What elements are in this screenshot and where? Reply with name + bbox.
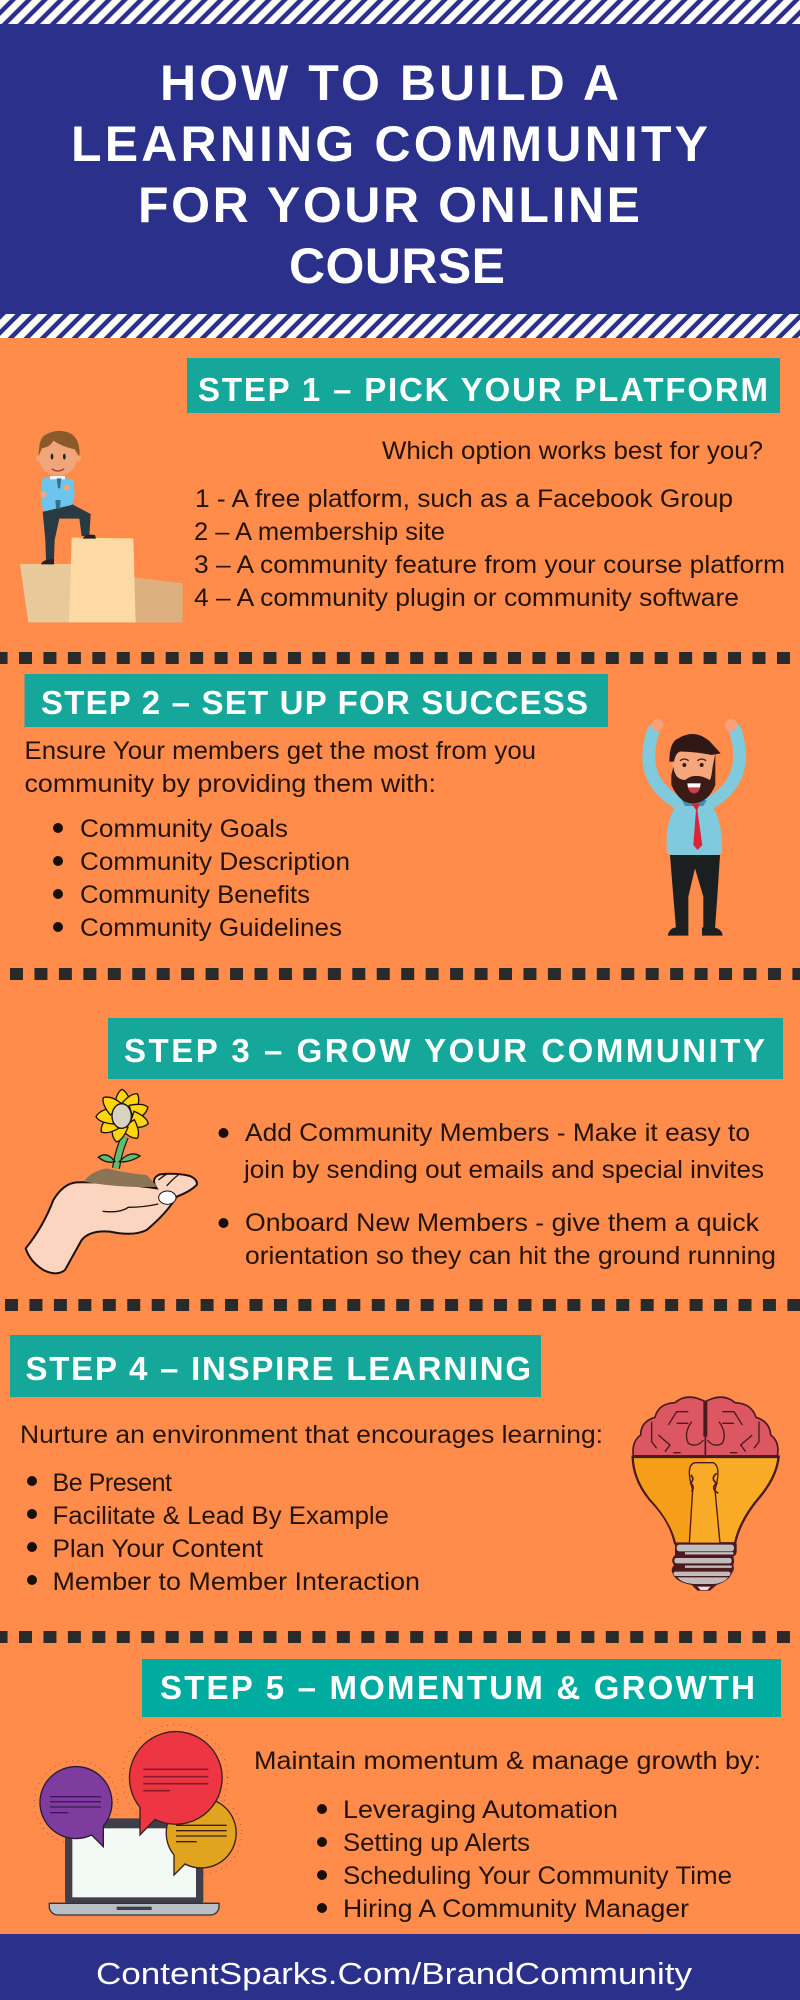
step 4 bullet list: Member to Member Interaction — [52, 1568, 420, 1596]
step 2 heading: STEP 2 – SET UP FOR SUCCESS — [41, 684, 588, 721]
step 1 options list: 2 – A membership site — [194, 518, 445, 546]
step 4 bullet list: Facilitate & Lead By Example — [52, 1502, 389, 1530]
icon: cheering bearded man — [649, 719, 740, 936]
step 4 bullet list — [27, 1469, 420, 1596]
step 2 bullet list: Community Goals — [80, 815, 288, 843]
footer url: ContentSparks.Com/BrandCommunity — [96, 1956, 693, 1991]
step 3 bullet list — [218, 1119, 776, 1270]
step 2 intro text: community by providing them with: — [24, 770, 436, 798]
step 2 bullet list: Community Benefits — [80, 881, 310, 909]
footer banner — [0, 1934, 800, 2000]
step 2 heading — [24, 674, 608, 727]
step 2 intro text — [24, 737, 536, 798]
step 4 heading — [10, 1335, 541, 1397]
step 3 heading: STEP 3 – GROW YOUR COMMUNITY — [124, 1032, 765, 1069]
step 4 heading: STEP 4 – INSPIRE LEARNING — [26, 1350, 531, 1387]
step 1 options list: 4 – A community plugin or community software — [194, 584, 739, 612]
panel: step 5 — [34, 1659, 781, 1923]
panel: step 2 — [24, 674, 740, 942]
title: FOR YOUR ONLINE — [138, 177, 640, 233]
step 5 bullet list: Hiring A Community Manager — [343, 1895, 689, 1923]
title: LEARNING COMMUNITY — [71, 116, 708, 172]
panel: step 1 — [20, 358, 785, 622]
step 5 heading — [142, 1659, 781, 1717]
step 2 bullet list — [53, 815, 350, 942]
panel: step 4 — [10, 1335, 779, 1596]
icon: hand holding sunflower — [26, 1089, 197, 1273]
icon: brain light bulb — [633, 1397, 779, 1591]
step 5 bullet list: Setting up Alerts — [343, 1829, 530, 1857]
step 1 options list: 1 - A free platform, such as a Facebook Group — [195, 485, 733, 513]
icon: laptop with speech bubbles — [34, 1725, 242, 1915]
title — [71, 55, 708, 294]
step 1 intro text: Which option works best for you? — [382, 437, 763, 465]
step 5 bullet list: Scheduling Your Community Time — [343, 1862, 732, 1890]
title: HOW TO BUILD A — [160, 55, 619, 111]
step 5 bullet list — [317, 1796, 732, 1923]
step 4 bullet list: Plan Your Content — [52, 1535, 263, 1563]
step 5 bullet list: Leveraging Automation — [343, 1796, 618, 1824]
panel: step 3 — [26, 1018, 783, 1273]
header banner — [0, 0, 800, 338]
step 1 heading: STEP 1 – PICK YOUR PLATFORM — [198, 371, 768, 408]
step 3 bullet list: Onboard New Members - give them a quick — [245, 1209, 760, 1237]
step 2 bullet list: Community Description — [80, 848, 350, 876]
step 2 bullet list: Community Guidelines — [80, 914, 342, 942]
step 1 options list — [194, 485, 785, 612]
step 3 bullet list: orientation so they can hit the ground running — [245, 1242, 776, 1270]
step 2 intro text: Ensure Your members get the most from you — [24, 737, 536, 765]
step 3 bullet list: Add Community Members - Make it easy to — [245, 1119, 750, 1147]
step 5 heading: STEP 5 – MOMENTUM & GROWTH — [160, 1669, 755, 1706]
step 1 options list: 3 – A community feature from your course platform — [194, 551, 785, 579]
step 4 bullet list: Be Present — [52, 1469, 172, 1497]
step 4 intro text: Nurture an environment that encourages learning: — [20, 1421, 603, 1449]
icon: man on podium — [20, 431, 183, 622]
step 3 bullet list: join by sending out emails and special invites — [243, 1156, 764, 1184]
step 1 heading — [187, 358, 780, 413]
title: COURSE — [289, 238, 505, 294]
step 5 intro text: Maintain momentum & manage growth by: — [254, 1747, 761, 1775]
step 3 heading — [108, 1018, 783, 1079]
